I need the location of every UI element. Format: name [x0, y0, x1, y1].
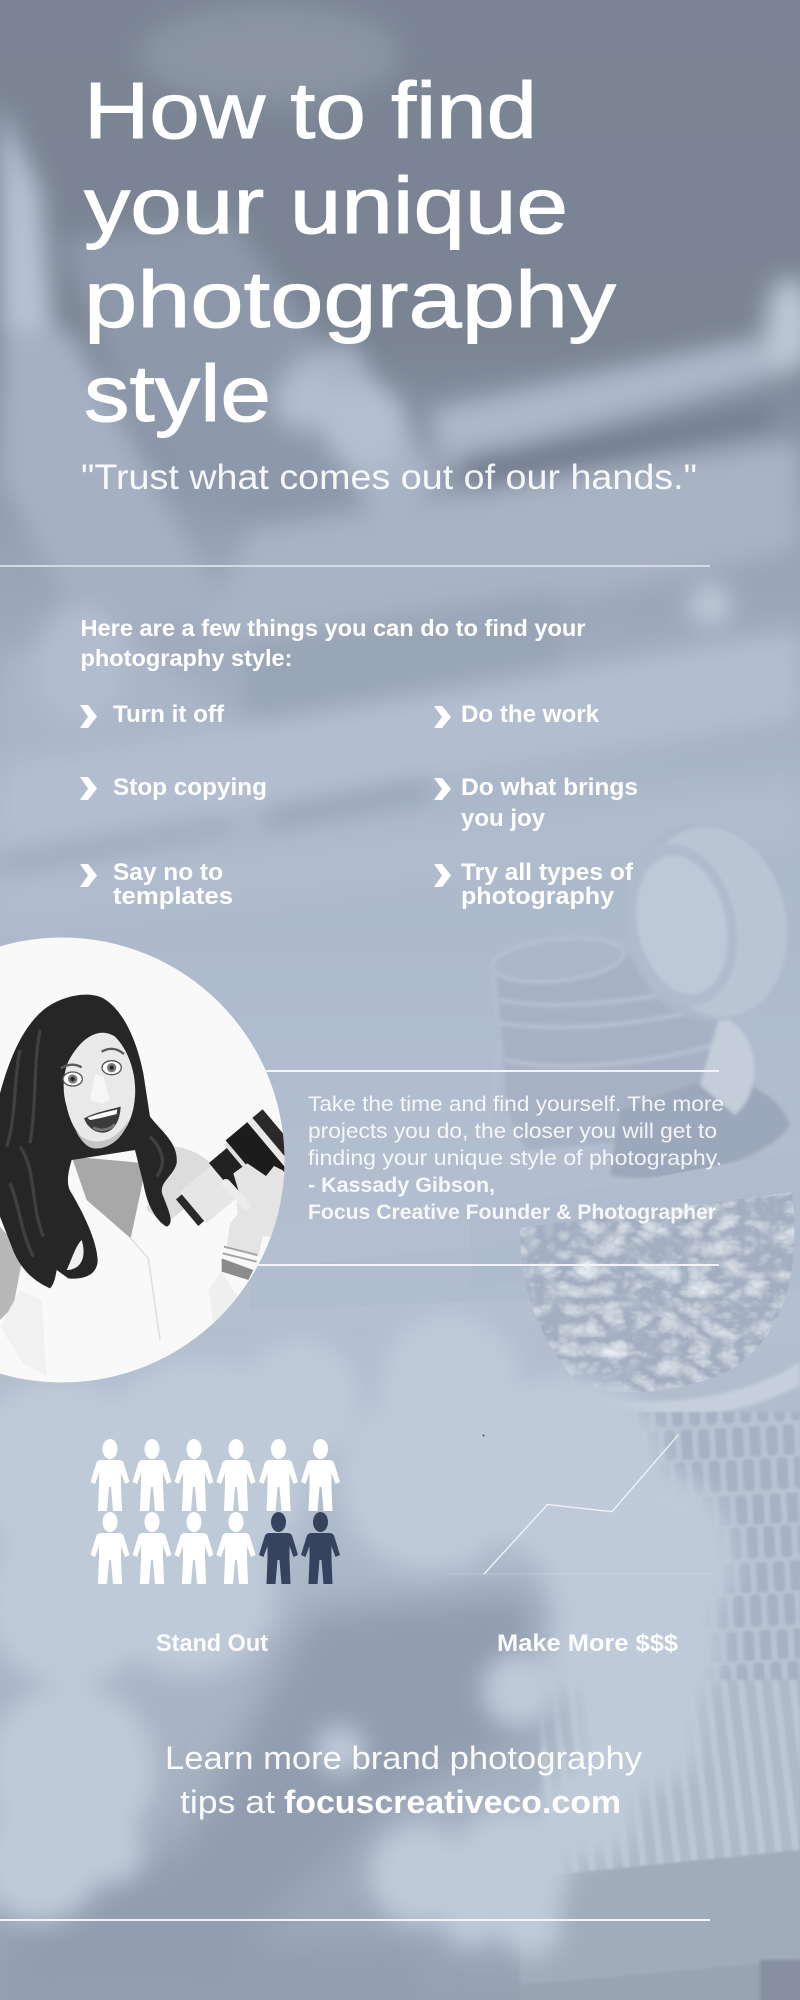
title: How to find [84, 66, 537, 155]
subtitle quote: "Trust what comes out of our hands." [81, 458, 697, 497]
intro text: Here are a few things you can do to find your [80, 615, 586, 641]
title: photography [84, 255, 616, 344]
divider top [0, 565, 710, 567]
tip: say no to templates: templates [113, 883, 233, 910]
blurred flowers [0, 1315, 735, 2000]
label: stand out: Stand Out [156, 1630, 268, 1657]
title [84, 66, 616, 438]
pictogram: 10 of 12 people white, 2 navy [90, 1439, 340, 1584]
tip: try all types of photography [434, 859, 634, 910]
quote text: - Kassady Gibson, [308, 1174, 495, 1197]
line chart: rising income [450, 1434, 712, 1574]
mouth [84, 1107, 121, 1133]
label: make more money: Make More $$$ [497, 1630, 679, 1657]
intro text: photography style: [80, 645, 292, 671]
hair highlights [7, 1030, 162, 1257]
quote panel [258, 1070, 724, 1266]
title: style [84, 349, 271, 438]
tip: do what brings you joy: you joy [461, 805, 546, 832]
hand and watch [227, 1163, 283, 1257]
quote text [308, 1093, 724, 1224]
face [64, 1033, 135, 1147]
tip: do what brings you joy [434, 774, 638, 832]
intro text [80, 615, 586, 671]
tip: say no to templates [80, 859, 233, 910]
waffle table pattern [520, 1412, 800, 2000]
tip: try all types of photography: photography [461, 883, 615, 910]
checklist: six tips [80, 701, 638, 910]
eyes [63, 1072, 82, 1086]
call to action [165, 1740, 642, 1820]
divider bottom [0, 1919, 710, 1921]
skin: chest and arm [72, 1157, 147, 1238]
tip: do what brings you joy: Do what brings [461, 774, 638, 801]
quote text: projects you do, the closer you will get to [308, 1120, 717, 1143]
dark table corner [760, 1960, 800, 2000]
camera lens [176, 1109, 284, 1226]
tip: do the work: Do the work [461, 701, 600, 728]
title: your unique [84, 161, 568, 250]
call to action: focuscreativeco.com [284, 1784, 621, 1820]
hair [0, 995, 177, 1288]
quote text: Take the time and find yourself. The more [308, 1093, 724, 1116]
tip: try all types of photography: Try all types of [461, 859, 634, 886]
quote text: finding your unique style of photography. [308, 1147, 722, 1170]
call to action: tips at [180, 1784, 275, 1820]
jar and lemon [250, 807, 800, 1310]
call to action: Learn more brand photography [165, 1740, 642, 1776]
tip: stop copying: Stop copying [113, 774, 267, 801]
tip: turn it off: Turn it off [113, 701, 225, 728]
shirt details [131, 1238, 160, 1340]
tip: say no to templates: Say no to [113, 859, 223, 886]
quote text: Focus Creative Founder & Photographer [308, 1201, 716, 1224]
portrait: founder with camera in circle [0, 930, 302, 1390]
lower glass [520, 1192, 800, 1419]
